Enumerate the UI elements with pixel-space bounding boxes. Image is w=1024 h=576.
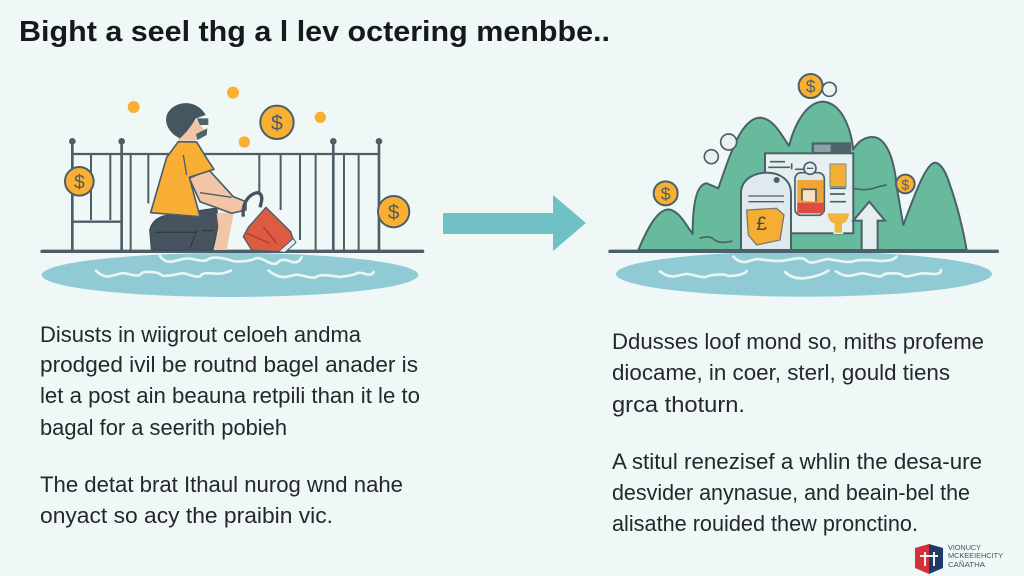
text block: left upper: Disusts in wiigrout celoeh andma: [40, 322, 362, 347]
text block: right upper: [612, 329, 984, 417]
coins: $: [661, 184, 671, 204]
text block: left lower: onyact so acy the praibin vic.: [40, 503, 333, 528]
trophy: [827, 213, 850, 233]
person with bag: [150, 103, 296, 252]
text block: left upper: [40, 322, 420, 440]
coins and dots: $: [271, 111, 283, 135]
coins and dots: $: [74, 172, 85, 193]
coins and dots: $: [388, 201, 400, 224]
logo shield: [915, 544, 943, 574]
text block: left upper: prodged ivil be routnd bagel anader is: [40, 352, 418, 377]
ground line: [610, 246, 997, 256]
coins and dots: [65, 87, 409, 227]
logo text: VIONUCY: [948, 545, 981, 552]
text block: right upper: Ddusses loof mond so, miths profeme: [612, 329, 984, 354]
phone card: [741, 173, 791, 250]
arrow: [443, 195, 586, 251]
logo text: [948, 545, 1003, 569]
logo: [915, 544, 1003, 574]
coins: [654, 74, 915, 205]
phone card: £: [756, 214, 767, 235]
coins: $: [806, 77, 816, 97]
text block: right lower: A stitul renezisef a whlin the desa-ure: [612, 449, 982, 474]
fence: [69, 138, 382, 250]
water pool: [42, 253, 418, 297]
coins: $: [901, 176, 909, 192]
panel: right illustration: [610, 74, 997, 297]
text block: left lower: The detat brat Ithaul nurog wnd nahe: [40, 472, 403, 497]
up arrow: [853, 202, 885, 250]
text block: left lower: [40, 472, 403, 528]
text block: left upper: bagal for a seerith pobieh: [40, 415, 287, 440]
text block: right lower: [612, 449, 982, 536]
text block: right lower: desvider anynasue, and beain-bel the: [612, 480, 970, 505]
title: Bight a seel thg a l lev octering menbbe..: [19, 16, 610, 48]
text block: right upper: grca thoturn.: [612, 392, 745, 417]
panel: left illustration: [42, 87, 423, 297]
text block: right upper: diocame, in coer, sterl, gould tiens: [612, 360, 950, 385]
document panel: [765, 142, 853, 233]
logo text: CAÑATHA: [948, 560, 985, 569]
ground line: [42, 246, 423, 256]
text block: left upper: let a post ain beauna retpili than it le to: [40, 383, 420, 408]
mountains: [638, 102, 967, 250]
text block: right lower: alisathe rouided thew pronctino.: [612, 511, 918, 536]
logo text: MCKEEIEHCITY: [948, 553, 1003, 560]
water pool: [616, 251, 992, 297]
